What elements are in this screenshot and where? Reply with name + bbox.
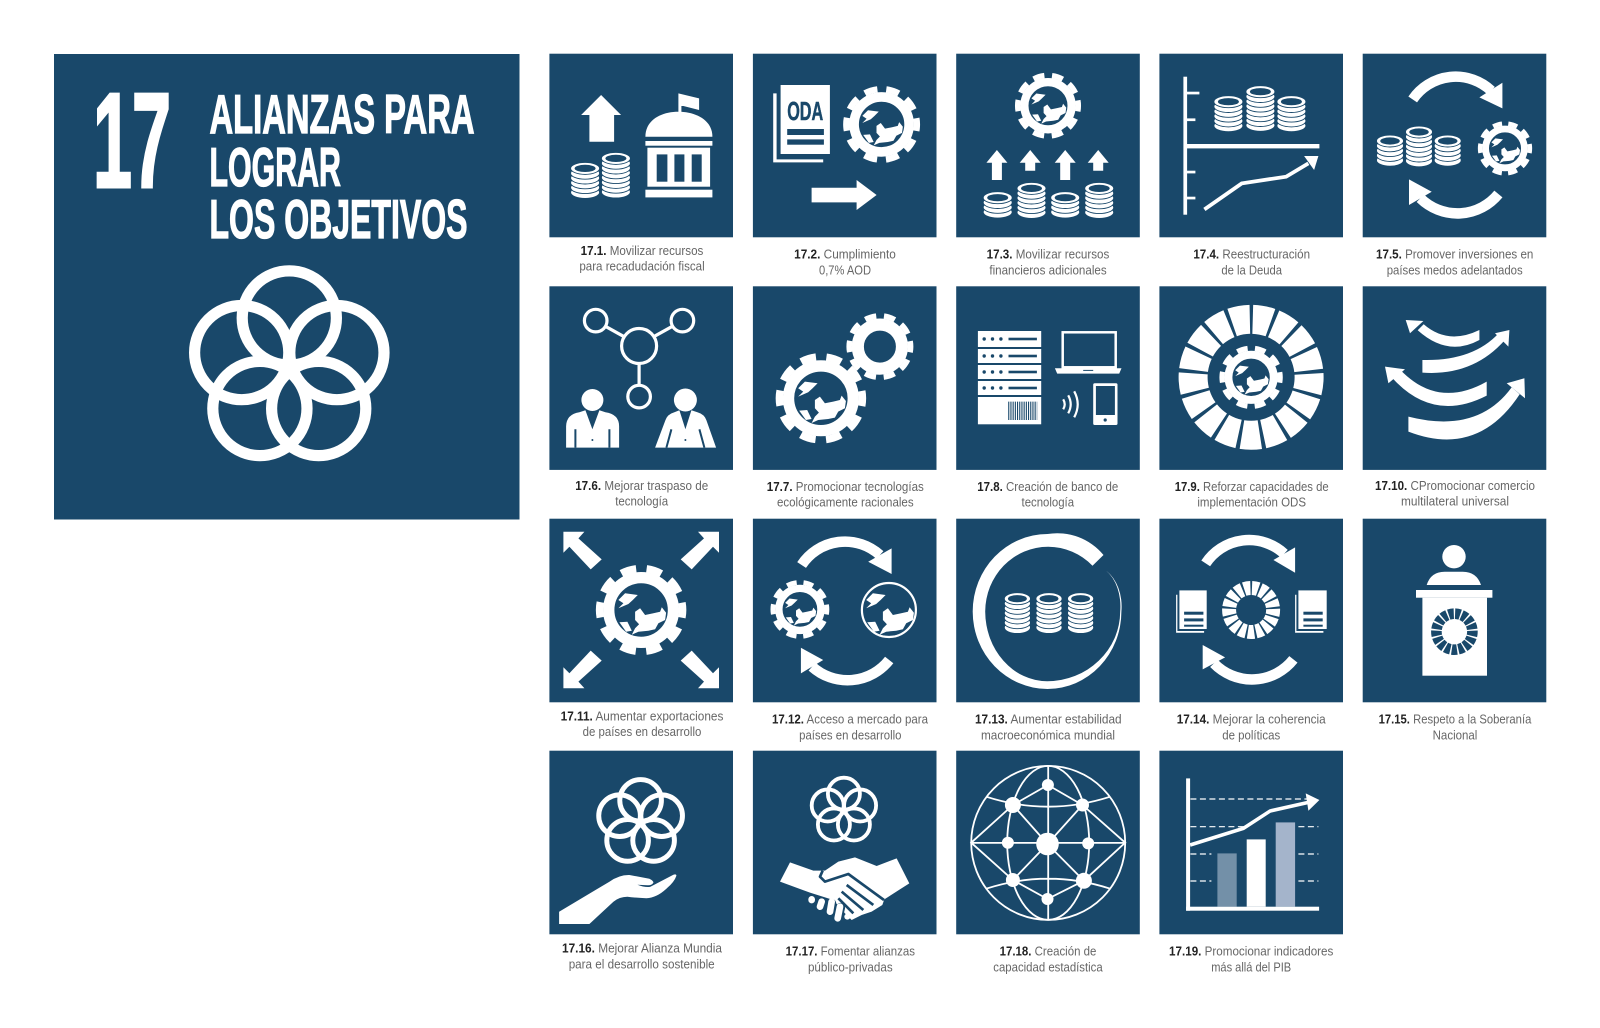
goal number: 17 <box>93 65 171 216</box>
tile background <box>956 751 1140 934</box>
caption: 17.18. Creación de <box>1000 944 1096 959</box>
caption: tecnología <box>1022 495 1075 510</box>
icon: four curved trade arrows <box>1385 320 1525 439</box>
icon: gear, upward arrows and coins <box>983 75 1114 218</box>
panel: 17.5 <box>1363 54 1546 277</box>
caption: macroeconómica mundial <box>981 727 1115 742</box>
caption: capacidad estadística <box>993 960 1103 975</box>
caption: tecnología <box>615 494 669 509</box>
icon: ODA document, gear and arrow <box>773 85 917 210</box>
icon: circular arrows, wheel and documents <box>1176 540 1327 679</box>
tile background <box>956 286 1140 470</box>
panel: 17.1 <box>549 54 733 274</box>
caption: 17.13. Aumentar estabilidad <box>975 711 1122 726</box>
icon: arrow, coins and government building <box>571 93 712 198</box>
caption: 17.9. Reforzar capacidades de <box>1175 479 1329 494</box>
panel: 17.6 <box>549 286 733 509</box>
caption: 17.7. Promocionar tecnologías <box>767 479 924 494</box>
panel: 17.7 <box>753 286 936 510</box>
panel: 17.19 <box>1159 751 1343 975</box>
icon: circular arrows, coins and gear <box>1377 77 1530 213</box>
caption: 17.10. CPromocionar comercio <box>1375 478 1535 493</box>
panel: 17.10 <box>1363 286 1546 509</box>
caption <box>562 940 723 971</box>
caption <box>1177 711 1326 742</box>
caption: 17.12. Acceso a mercado para <box>772 711 929 726</box>
icon: speaker at podium <box>1416 545 1492 676</box>
panel: 17.17 <box>753 751 936 975</box>
icon: two gears with globe <box>779 316 911 440</box>
tile background <box>753 54 936 237</box>
icon: server, laptop, wifi and phone <box>978 331 1122 425</box>
panel: 17.11 <box>549 519 733 739</box>
caption: para recadudación fiscal <box>579 259 705 274</box>
caption: Nacional <box>1433 727 1477 742</box>
icon: networked globe <box>971 766 1125 920</box>
caption: 17.11. Aumentar exportaciones <box>561 708 724 724</box>
icon: gear with four outward arrows <box>563 532 719 688</box>
heading: ALIANZAS PARA <box>210 83 474 145</box>
caption: 17.4. Reestructuración <box>1193 246 1310 261</box>
icon: network nodes and two people <box>566 309 716 448</box>
tile background <box>549 286 733 470</box>
icon: five interlocking rings <box>195 271 384 456</box>
icon: hand holding rings <box>559 780 682 924</box>
caption: de políticas <box>1222 727 1281 742</box>
caption <box>575 478 708 509</box>
caption: 17.19. Promocionar indicadores <box>1169 944 1334 959</box>
tile background <box>1363 286 1546 470</box>
tile background <box>753 519 936 702</box>
caption: para el desarrollo sostenible <box>569 956 715 971</box>
icon: SDG wheel with gear <box>1193 319 1309 435</box>
panel: 17.12 <box>753 519 936 742</box>
caption: 0,7% AOD <box>819 262 871 277</box>
icon: rings above handshake <box>780 778 909 920</box>
caption: financieros adicionales <box>989 262 1107 277</box>
panel: 17.13 <box>956 519 1140 742</box>
tile background <box>1159 519 1343 702</box>
caption <box>561 708 724 739</box>
tile background <box>549 519 733 702</box>
caption: países en desarrollo <box>799 727 901 742</box>
panel: 17.14 <box>1159 519 1343 742</box>
heading <box>210 83 474 250</box>
caption <box>1376 246 1533 277</box>
caption <box>579 243 705 274</box>
caption: 17.8. Creación de banco de <box>977 479 1118 494</box>
caption <box>772 711 929 742</box>
caption <box>1375 478 1535 509</box>
tile background <box>549 54 733 237</box>
caption: de la Deuda <box>1221 262 1283 277</box>
caption <box>1169 944 1334 975</box>
caption: público-privadas <box>808 960 893 975</box>
caption <box>993 944 1103 975</box>
caption: 17.17. Fomentar alianzas <box>786 944 915 959</box>
caption <box>1379 711 1532 742</box>
caption: multilateral universal <box>1401 494 1509 509</box>
panel: 17.18 <box>956 751 1140 975</box>
icon: tapering ring and coins <box>973 533 1122 689</box>
caption <box>975 711 1122 742</box>
panel: 17.16 <box>549 751 733 971</box>
panel: goal 17 header <box>54 54 520 520</box>
caption: 17.15. Respeto a la Soberanía <box>1379 711 1532 726</box>
icon: circular arrows, gear and globe <box>773 542 916 680</box>
icon: ODA document, gear and arrow: ODA <box>787 96 823 126</box>
tile background <box>1159 54 1343 237</box>
panel: 17.2 <box>753 54 936 277</box>
tile background <box>753 751 936 934</box>
caption: ecológicamente racionales <box>777 495 914 510</box>
caption: 17.1. Movilizar recursos <box>581 243 704 258</box>
caption: 17.16. Mejorar Alianza Mundia <box>562 940 723 955</box>
panel: 17.3 <box>956 54 1140 277</box>
tile background <box>549 751 733 934</box>
tile background <box>1159 286 1343 470</box>
caption: implementación ODS <box>1197 495 1306 510</box>
tile background <box>1363 519 1546 702</box>
caption <box>987 246 1110 277</box>
caption <box>794 246 896 277</box>
caption: 17.14. Mejorar la coherencia <box>1177 711 1326 726</box>
caption: 17.5. Promover inversiones en <box>1376 246 1533 261</box>
caption: de países en desarrollo <box>583 724 701 739</box>
caption <box>977 479 1118 510</box>
icon: bar chart with rising arrow <box>1186 778 1319 911</box>
tile background <box>1363 54 1546 237</box>
panel: 17.4 <box>1159 54 1343 277</box>
caption <box>767 479 924 510</box>
heading: LOGRAR <box>210 136 341 198</box>
caption <box>786 944 915 975</box>
tile background <box>956 54 1140 237</box>
caption: 17.6. Mejorar traspaso de <box>575 478 708 493</box>
tile background <box>1159 751 1343 934</box>
caption: 17.3. Movilizar recursos <box>987 246 1110 261</box>
tile background <box>753 286 936 470</box>
caption <box>1175 479 1329 510</box>
panel: 17.15 <box>1363 519 1546 742</box>
heading: LOS OBJETIVOS <box>210 188 468 250</box>
tile background <box>956 519 1140 702</box>
panel: 17.9 <box>1159 286 1343 510</box>
caption: países medos adelantados <box>1387 262 1523 277</box>
header background <box>54 54 520 520</box>
caption <box>1193 246 1310 277</box>
icon: debt chart with coins and rising line <box>1183 77 1319 215</box>
caption: 17.2. Cumplimiento <box>794 246 896 261</box>
panel: 17.8 <box>956 286 1140 510</box>
caption: más allá del PIB <box>1211 960 1291 975</box>
